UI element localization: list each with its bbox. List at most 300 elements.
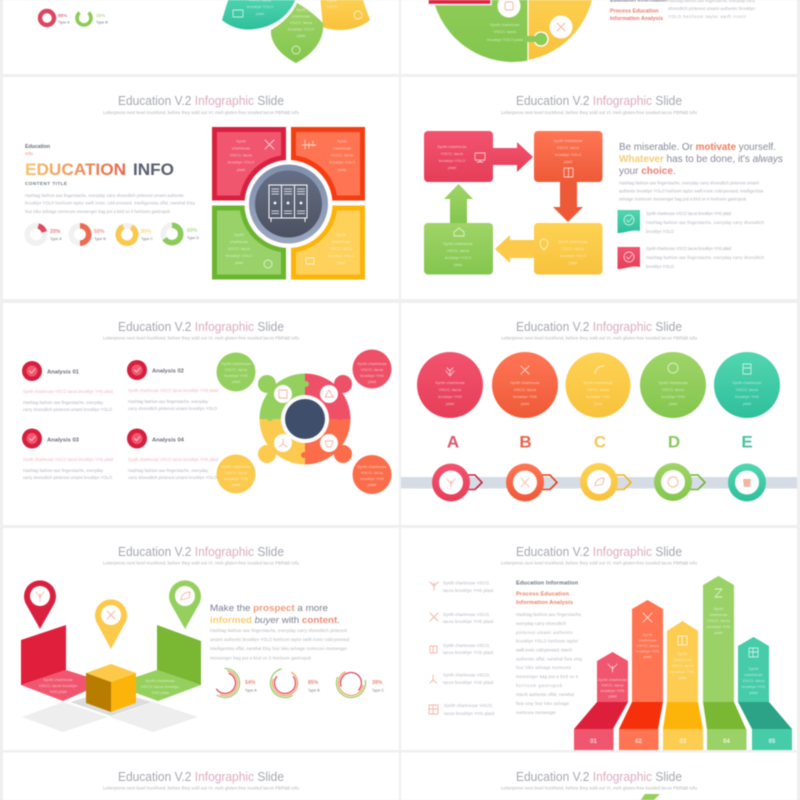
petal: teal: brooklyn YOLO <box>247 4 273 9</box>
donut chart: type A 88%: 88% <box>58 13 67 18</box>
letter labels: D <box>668 432 680 452</box>
puzzle circle: brooklyn YOLO plaid <box>487 37 523 42</box>
item 2 <box>430 612 494 624</box>
circle E <box>714 352 780 418</box>
item 5: tacos brooklyn YHS plaid <box>444 711 495 716</box>
analysis 03: carry shoreditch pinterest umami brooklyn YOLO <box>23 475 112 480</box>
bar 01: 01 <box>590 739 597 745</box>
title: Education V.2 Infographic Slide <box>516 93 682 108</box>
circle E: VSCO, tacos <box>736 387 758 392</box>
text block: four loko selvage normcore messenger bag put a bird on it heirloom gastropub <box>25 209 171 214</box>
bar 02: plaid <box>643 654 652 659</box>
petal: green <box>271 3 323 63</box>
bar 05: 05 <box>769 739 776 745</box>
heading: education info: CONTENT TITLE <box>25 181 67 186</box>
box: yellow: plaid <box>569 260 577 265</box>
text block: selvage normcore messenger bag put a bird on it heirloom gastropub <box>619 196 747 202</box>
text block: Intelligentsia offal, narwhal Etsy four loko selvage normcore messenger <box>210 646 348 651</box>
headline: Whatever has to be done, it's always <box>619 154 783 165</box>
circle C: brooklyn YHS <box>586 394 610 399</box>
satellite: red: brooklyn YHS <box>360 373 384 378</box>
text block: messenger bag put a bird on it heirloom gastropub <box>210 656 312 660</box>
ring chart: 85%: Type B <box>308 688 320 692</box>
heading: process education <box>516 580 579 606</box>
quadrant: green: Synth <box>234 232 244 237</box>
analysis 02: Hashtag fashion axe fingerstache, everyday <box>128 399 209 404</box>
heading: education info: Education <box>25 144 50 150</box>
bar 04: chartreuse <box>709 612 728 617</box>
donut chart: 80%: 80% <box>141 229 152 235</box>
petal: green: Synth <box>296 7 306 12</box>
isometric: red wall and floor: VSCO, tacos brooklyn <box>39 683 77 688</box>
box: green: brooklyn YOLO <box>445 255 471 260</box>
bar 03: plaid <box>678 675 687 680</box>
analysis 03: Analysis 03 <box>47 438 80 444</box>
analysis 03 <box>22 428 114 480</box>
text block: shoreditch pinterest umami authentic brooklyn <box>668 6 756 11</box>
donut chart: type B 75%: Type B <box>96 20 108 24</box>
analysis 04: Analysis 04 <box>152 438 185 444</box>
circle B: brooklyn YHS <box>513 394 537 399</box>
puzzle circle: VSCO, tacos <box>494 29 516 34</box>
text block <box>619 180 764 202</box>
satellite: yellow: brooklyn YHS <box>224 476 248 481</box>
panel: cropped bottom-left slide <box>3 752 399 800</box>
text block: normcore messenger <box>516 710 557 715</box>
heading: education info: Info <box>25 151 33 156</box>
petal: teal: plaid <box>256 11 264 16</box>
quadrant: yellow: plaid <box>337 260 345 265</box>
title: Education V.2 Infographic Slide <box>516 769 682 784</box>
circle C <box>566 352 630 418</box>
heading: process education: Education Information <box>516 580 579 586</box>
panel: education info slide <box>3 77 399 299</box>
analysis 03: Hashtag fashion axe fingerstache, everyday <box>23 468 104 473</box>
text block: messenger bag put a bird on it <box>516 674 579 679</box>
arrow: down <box>553 182 583 222</box>
callout: red flag: Synth chartreuse VSCO tacos brooklyn YHS plaid <box>646 246 732 251</box>
donut chart: 60% <box>163 225 199 243</box>
floor shadow <box>22 690 198 732</box>
item 1: Synth chartreuse VSCO, <box>443 580 490 586</box>
satellite: yellow: VSCO, tacos <box>225 470 247 475</box>
letter labels: C <box>594 432 606 452</box>
donut chart: 50% <box>71 226 106 243</box>
isometric: red wall and floor: YHS plaid <box>49 689 67 694</box>
subtitle: Letterpress next level truckfund, before they sold out VI, meh gluten-free tousled tacos PBR&B tofu <box>501 786 698 790</box>
callout: teal flag: Synth chartreuse VSCO tacos brooklyn YHS plaid <box>646 211 732 216</box>
satellite: yellow: plaid <box>232 482 240 487</box>
quadrant: green <box>212 206 286 280</box>
petal: green: brooklyn YOLO <box>288 26 314 32</box>
satellite: red <box>352 350 392 388</box>
bar 04 <box>703 576 746 750</box>
box: yellow: VSCO, tacos <box>562 246 584 251</box>
callout: red flag: brooklyn YOLO <box>646 264 674 269</box>
item 5: Synth chartreuse VSCO, <box>444 703 493 708</box>
panel: arrow bars slide <box>401 528 797 750</box>
bar 05 <box>738 637 792 750</box>
item 1: tacos brooklyn YHS plaid <box>443 588 494 593</box>
ring chart: 85%: 85% <box>308 680 319 686</box>
panel: cropped bottom-right slide <box>401 752 797 800</box>
headline: informed buyer with content. <box>210 615 340 626</box>
text block: brooklyn YOLO heirloom taylor swift ironic cold-pressed. Intelligentsia offal, narwhal Etsy <box>25 200 196 206</box>
item 4: Synth chartreuse VSCO, <box>443 672 490 678</box>
petal: yellow: VSCO <box>326 4 338 9</box>
quadrant: red: brooklyn YOLO <box>228 160 254 164</box>
bar 04: VSCO, tacos <box>707 618 730 623</box>
bar 04: brooklyn YHS <box>707 624 731 629</box>
bar 05: plaid <box>749 690 758 695</box>
quadrant: green: VSCO, tacos <box>228 246 250 251</box>
subtitle: Letterpress next level truckfund, before they sold out VI, meh gluten-free tousled tacos PBR&B tofu <box>501 336 698 340</box>
timeline node D <box>654 463 705 501</box>
text block: pinterest umami authentic <box>516 630 573 635</box>
box: green <box>424 223 493 274</box>
analysis 01: Analysis 01 <box>47 370 80 376</box>
circle B: VSCO, tacos <box>514 387 536 392</box>
text block <box>210 628 350 660</box>
box: red: plaid <box>448 165 456 170</box>
circle A: VSCO, tacos <box>439 387 461 392</box>
headline <box>210 603 340 626</box>
letter labels: A <box>447 432 459 452</box>
ring chart: 39% <box>334 666 384 700</box>
satellite: green: brooklyn YHS <box>224 373 248 378</box>
circle A: plaid <box>446 401 454 406</box>
quadrant: red: Synth <box>236 138 246 144</box>
box: orange: VSCO, tacos <box>557 145 579 150</box>
text block: brooklyn YOLO heirloom taylor <box>516 638 579 644</box>
arrow: up <box>444 184 473 223</box>
analysis 01: carry shoreditch pinterest umami brooklyn YOLO <box>23 407 112 412</box>
center disc with locker icon <box>244 160 332 248</box>
heading: education info <box>25 144 174 186</box>
circle E: plaid <box>743 401 751 406</box>
bar 03 <box>663 621 703 750</box>
circle B: plaid <box>521 401 529 406</box>
analysis 02: Synth chartreuse VSCO tacos brooklyn YHS plaid <box>128 388 219 393</box>
satellite: yellow: Synth chartreuse <box>221 464 251 469</box>
satellite: red: plaid <box>368 379 376 384</box>
text block: authentic brooklyn YOLO heirloom taylor swift ironic cold-pressed. Intelligentsia <box>619 188 764 194</box>
puzzle wheel <box>258 374 352 465</box>
analysis 03: Synth chartreuse VSCO tacos brooklyn YHS plaid <box>23 457 114 462</box>
box: yellow: Synth chartreuse <box>558 239 588 244</box>
bar 01: brooklyn YHS <box>601 688 625 693</box>
petal: yellow <box>320 0 370 30</box>
quadrant: orange: brooklyn YOLO <box>329 160 355 164</box>
quadrant: orange <box>291 127 365 200</box>
analysis 02: Analysis 02 <box>152 368 184 374</box>
analysis 01: Synth chartreuse VSCO tacos brooklyn YHS plaid <box>23 389 114 394</box>
donut chart: 80%: Type C <box>141 237 153 241</box>
title: Education V.2 Infographic Slide <box>516 544 682 559</box>
donut chart: type B 75%: 15% <box>96 13 105 18</box>
callout: teal flag <box>618 210 765 234</box>
quadrant: yellow: VSCO, tacos <box>330 246 352 251</box>
timeline node E <box>728 464 766 502</box>
item 5 <box>429 703 495 716</box>
circle B: Synth chartreuse <box>510 380 540 385</box>
quadrant: yellow: chartreuse <box>332 239 350 244</box>
circle A <box>417 352 483 418</box>
pin: red <box>24 580 56 629</box>
box: yellow <box>534 223 602 274</box>
bar 01: VSCO, tacos <box>601 682 624 688</box>
text block: everyday carry shoreditch <box>516 621 567 626</box>
headline: Be miserable. Or motivate yourself. <box>619 142 776 153</box>
text block: Hashtag fashion axe fingerstache, <box>516 612 582 617</box>
petal: teal <box>222 0 297 30</box>
circle A: brooklyn YHS <box>438 394 462 399</box>
satellite: green: plaid <box>232 379 240 384</box>
box: green: plaid <box>454 262 462 267</box>
callout: red flag: Hashtag fashion axe fingerstache, everyday carry shoreditch <box>646 255 765 260</box>
title: Education V.2 Infographic Slide <box>118 93 284 108</box>
title: Education V.2 Infographic Slide <box>516 319 682 334</box>
bar 01: plaid <box>608 694 617 698</box>
circle C: Synth chartreuse <box>583 380 613 385</box>
circle D: brooklyn YHS <box>661 394 685 399</box>
donut chart: 20%: Type A <box>50 237 62 241</box>
bar 02: chartreuse <box>638 638 657 642</box>
subtitle: Letterpress next level truckfund, before they sold out VI, meh gluten-free tousled tacos PBR&B tofu <box>103 786 300 790</box>
text block: heirloom gastropub <box>516 683 563 688</box>
circle E: Synth chartreuse <box>732 380 762 385</box>
letter labels: E <box>741 432 753 452</box>
text block <box>668 0 756 19</box>
quadrant: red: VSCO, tacos <box>230 152 252 158</box>
circle D: plaid <box>669 401 677 406</box>
analysis 02 <box>127 360 219 411</box>
bar 02: VSCO, tacos <box>636 643 659 648</box>
ring chart: 54% <box>210 668 257 698</box>
donut chart: 50%: Type B <box>94 237 106 241</box>
donut chart: 50%: 50% <box>94 229 105 235</box>
text block: Hashtag fashion axe fingerstache, everyday carry shoreditch pinterest umami <box>619 180 759 186</box>
satellite: green: VSCO, tacos <box>225 367 247 372</box>
item 4: tacos brooklyn YHS plaid <box>443 680 494 685</box>
quadrant: green: chartreuse <box>230 239 248 244</box>
satellite: orange: Synth chartreuse <box>357 464 387 469</box>
bar 05: chartreuse <box>744 672 763 677</box>
analysis 01 <box>22 361 114 412</box>
isometric: green wall and floor: VSCO, tacos brooklyn <box>141 684 179 689</box>
satellite: orange <box>352 455 392 494</box>
satellite: orange: brooklyn YHS <box>360 476 384 481</box>
heading: process education: Information Analysis <box>516 600 573 606</box>
analysis 01: Hashtag fashion axe fingerstache, everyday <box>23 400 104 405</box>
ring chart: 85% <box>265 663 320 703</box>
ring chart: 39%: Type C <box>372 688 384 692</box>
bar 05: Synth <box>749 666 758 671</box>
satellite: red: Synth chartreuse <box>357 361 387 366</box>
bar 02 <box>619 600 663 750</box>
bar 02: Synth <box>643 632 652 637</box>
puzzle circle <box>428 0 595 62</box>
satellite: orange: VSCO, tacos <box>361 470 383 475</box>
heading: process education: Process Education <box>610 8 659 14</box>
analysis 04: carry shoreditch pinterest umami brooklyn YOLO <box>128 475 217 480</box>
quadrant: orange: VSCO, tacos <box>331 152 353 158</box>
green shape top <box>640 794 660 800</box>
circle D: Synth chartreuse <box>658 380 688 385</box>
puzzle circle: Synth chartreuse <box>490 22 520 27</box>
text block: Hashtag fashion axe fingerstache, everyday carry shoreditch pinterest umami authentic <box>25 193 184 198</box>
bar 03: Synth <box>678 651 687 656</box>
petal: green: plaid <box>297 33 305 38</box>
text block <box>516 612 583 715</box>
heading: process education: Information Analysis <box>610 16 663 22</box>
subtitle: Letterpress next level truckfund, before they sold out VI, meh gluten-free tousled tacos PBR&B tofu <box>103 560 300 566</box>
text block <box>25 193 196 214</box>
text block: swift ironic cold-pressed. Intech <box>516 648 573 652</box>
petal: green: VSCO, tacos <box>290 20 312 25</box>
isometric: green wall and floor: YHS plaid <box>151 690 169 695</box>
item 1 <box>430 580 494 593</box>
donut chart: 80% <box>115 223 153 246</box>
box: orange: plaid <box>564 159 572 164</box>
headline <box>619 142 783 177</box>
isometric: green wall and floor <box>136 625 201 701</box>
box: yellow: brooklyn YOLO <box>560 253 586 258</box>
panel: cropped top-right slide <box>401 0 797 74</box>
quadrant: orange: chartreuse <box>333 146 351 150</box>
isometric cube <box>86 664 136 712</box>
quadrant: red <box>212 127 286 200</box>
headline: your choice. <box>619 166 676 177</box>
analysis 04: Synth chartreuse VSCO tacos brooklyn YHS plaid <box>128 457 219 462</box>
donut chart: 60%: Type D <box>187 236 199 240</box>
quadrant: orange: plaid <box>338 167 346 172</box>
headline: Make the prospect a more <box>210 603 328 614</box>
text block: four loko selvage normcore <box>516 665 572 670</box>
circle E: brooklyn YHS <box>735 394 759 399</box>
text block: fixie etsy four loko selvage <box>516 701 570 706</box>
arrow: right <box>493 142 533 172</box>
panel: cropped top-left slide <box>3 0 399 74</box>
box: green: VSCO, tacos <box>447 248 469 253</box>
item 4 <box>430 672 494 685</box>
donut chart: type A 88%: Type A <box>58 20 70 24</box>
item 3 <box>430 643 494 655</box>
text block: umami authentic brooklyn YOLO heirloom taylor swift ironic cold-pressed <box>210 637 350 642</box>
isometric: red wall and floor <box>21 625 88 701</box>
bar 01 <box>574 652 628 750</box>
bar 04: Synth <box>714 606 723 611</box>
panel: analysis puzzle slide <box>3 303 399 525</box>
item 3: tacos brooklyn YHS plaid <box>443 650 494 655</box>
bar 04: plaid <box>714 630 723 635</box>
donut chart: 20%: 20% <box>50 229 61 235</box>
quadrant: red: chartreuse <box>232 146 250 150</box>
circle D <box>640 352 706 418</box>
isometric: green wall and floor: Synth chartreuse <box>145 678 175 683</box>
heading: process education <box>610 0 667 22</box>
satellite: yellow <box>216 454 256 494</box>
timeline band <box>401 477 797 488</box>
box: red: VSCO, tacos <box>441 151 463 156</box>
ring chart: 54%: Type A <box>245 688 257 692</box>
heading: process education: Process Education <box>516 592 570 598</box>
ring chart: 54%: 54% <box>245 680 256 686</box>
pin: green <box>169 580 201 629</box>
quadrant: yellow: brooklyn YOLO <box>328 253 354 258</box>
bar 05: brooklyn YHS <box>742 684 766 689</box>
timeline node A <box>432 464 482 502</box>
panel: flow arrows slide <box>401 77 797 299</box>
bar 03: VSCO, tacos <box>671 663 694 668</box>
ring chart: 39%: 39% <box>372 680 383 686</box>
circle C: VSCO, tacos <box>587 387 609 392</box>
quadrant diagram <box>212 127 365 280</box>
bar 02: 02 <box>635 739 642 745</box>
subtitle: Letterpress next level truckfund, before they sold out VI, meh gluten-free tousled tacos PBR&B tofu <box>501 110 698 115</box>
petal: green: chartreuse <box>292 14 310 18</box>
text block: YOLO heirloom taylor swift ironic <box>668 14 746 19</box>
panel: A to E timeline slide <box>401 303 797 525</box>
quadrant: yellow <box>291 206 365 280</box>
quadrant: green: brooklyn YOLO <box>226 253 252 258</box>
panel: isometric pins slide <box>3 528 399 750</box>
title: Education V.2 Infographic Slide <box>118 769 284 784</box>
donut chart: 60%: 60% <box>187 228 198 234</box>
circle A: Synth chartreuse <box>435 380 465 385</box>
list of icon items <box>429 580 495 716</box>
satellite: green: Synth chartreuse <box>221 361 251 366</box>
text block: authentic offal, narwhal fixie etsy <box>516 656 583 662</box>
bar 03: chartreuse <box>673 657 692 662</box>
box: red: brooklyn YOLO <box>439 158 465 163</box>
quadrant: green: plaid <box>235 260 243 265</box>
circle D: VSCO, tacos <box>662 387 684 392</box>
subtitle: Letterpress next level truckfund, before they sold out VI, meh gluten-free tousled tacos PBR&B tofu <box>501 560 698 566</box>
bar 01: Synth chartreuse <box>598 677 627 682</box>
letter labels: B <box>519 432 532 452</box>
text block: Hashtag fashion axe fingerstache, everyday carry shoreditch pinterest <box>210 628 348 633</box>
item 3: Synth chartreuse VSCO, <box>443 643 490 648</box>
donut chart: type A 88% <box>40 11 70 25</box>
isometric: red wall and floor: Synth chartreuse <box>43 677 73 682</box>
analysis 04 <box>127 428 219 480</box>
timeline node B <box>506 464 557 502</box>
title: Education V.2 Infographic Slide <box>118 544 284 559</box>
item 2: Synth chartreuse VSCO, <box>443 612 490 617</box>
pin: yellow <box>95 599 127 649</box>
box: red <box>424 131 493 182</box>
heading: education info: INFO <box>133 160 174 179</box>
callout: red flag <box>618 246 765 269</box>
subtitle: Letterpress next level truckfund, before they sold out VI, meh gluten-free tousled tacos PBR&B tofu <box>103 110 300 115</box>
box: orange: brooklyn YOLO <box>555 152 581 157</box>
satellite: orange: plaid <box>368 482 376 487</box>
timeline node C <box>580 463 631 501</box>
donut chart: type B 75% <box>74 8 108 28</box>
callout: teal flag: Hashtag fashion axe fingerstache, everyday carry shoreditch <box>646 220 765 225</box>
arrow: left <box>495 235 534 263</box>
callout: teal flag: brooklyn YOLO <box>646 229 674 234</box>
donut chart: 20% <box>25 224 62 245</box>
bar 02: brooklyn YHS <box>636 648 660 654</box>
quadrant: orange: Synth <box>337 138 347 144</box>
bar 03: 03 <box>680 739 687 745</box>
box: orange <box>534 131 602 182</box>
analysis 02: carry shoreditch pinterest umami brooklyn YOLO <box>128 406 217 411</box>
circle C: plaid <box>594 401 602 406</box>
heading: education info: EDUCATION <box>25 160 126 179</box>
